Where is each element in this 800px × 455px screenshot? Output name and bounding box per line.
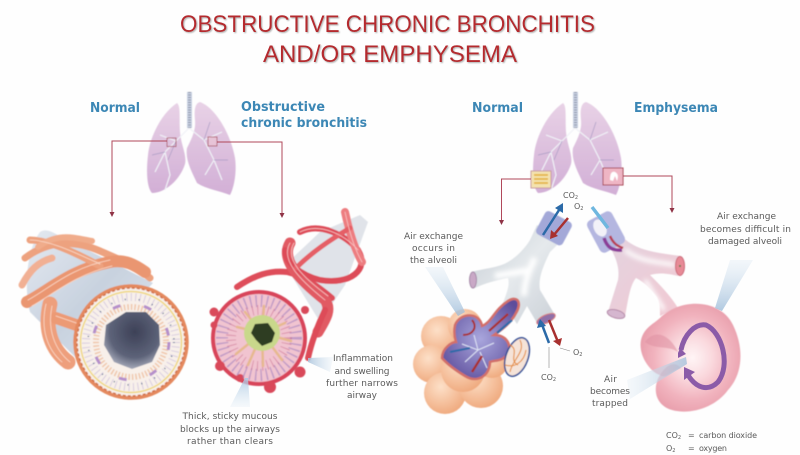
text: air exchange difficult: Air exchange [717,212,776,222]
text: air becomes trapped [590,375,630,409]
legend [666,431,757,454]
text: inflammation: and swelling [334,367,390,377]
labels: gases lower: 2 [579,352,582,358]
heading: normal (bronchitis side): Normal [90,101,140,116]
text: inflammation [326,354,398,401]
text: inflammation: airway [347,391,378,401]
labels: gases lower: CO [541,373,553,382]
pointer: air exchange in alveoli [425,267,465,316]
heading: emphysema: Emphysema [634,101,718,116]
labels: gases upper: O [574,202,580,211]
heading: obstructive chronic bronchitis: chronic bronchitis [241,116,367,131]
emphysema enlarged alveolus [641,304,740,412]
normal bronchus [470,210,573,327]
text: air exchange difficult: damaged alveoli [708,237,782,247]
legend: 2 [678,435,681,441]
airflow arrows upper [543,203,568,239]
tube body [285,215,368,322]
text: thick sticky mucous: Thick, sticky mucous [182,412,278,422]
arrow: lung to obstructed airway [217,142,284,218]
pointer: thick mucous [230,378,250,407]
capillary net [500,334,534,380]
title: OBSTRUCTIVE CHRONIC BRONCHITIS [180,11,595,38]
swollen wall [213,292,305,384]
normal airway cross-section and tube [22,230,187,398]
text: air exchange occurs: the alveoli [410,256,457,266]
lungs: emphysema diagram [531,92,623,195]
airflow arrow in emphysema bronchus [592,207,608,228]
mucosal folds [236,306,291,366]
text: thick sticky mucous: blocks up the airways [180,425,280,435]
text: inflammation: further narrows [326,379,398,389]
lumen [104,312,160,369]
text: air exchange occurs: Air exchange [404,232,463,242]
legend: 2 [672,448,675,454]
text: thick sticky mucous: rather than clears [187,437,273,447]
text: air exchange difficult: becomes difficult in [700,225,791,235]
tube body [27,230,153,362]
lungs: bronchitis diagram [147,92,236,195]
mucus ring [244,315,280,351]
legend: carbon dioxide [699,431,757,440]
text: inflammation: Inflammation [333,354,393,364]
legend: = [688,444,695,453]
labels: gases upper: 2 [580,206,583,212]
labels: gases lower [541,347,582,383]
text: air becomes trapped: Air [604,375,617,385]
normal alveoli cluster [413,299,534,414]
heading: normal (emphysema side): Normal [472,101,523,116]
text: thick sticky mucous [180,412,280,447]
airway wall [75,286,187,398]
arrow: lung to normal alveoli [499,179,531,225]
inner airflow [497,320,512,333]
labels: gases lower: 2 [553,377,556,383]
heading: obstructive chronic bronchitis: Obstructive [241,100,325,115]
obstructed airway cross-section and tube [210,212,368,393]
smooth muscle bands [22,237,150,362]
airflow arrows lower [537,319,562,346]
inflamed muscle bands [237,212,362,358]
title [180,11,595,68]
arrow: normal lung to normal airway [110,141,167,217]
pointer: air trapped [627,357,687,399]
legend: = [688,431,695,440]
title: AND/OR EMPHYSEMA [263,41,517,68]
text: air exchange occurs: occurs in [412,244,455,254]
trapped air circular arrow [678,325,724,388]
emphysema bronchus [585,210,684,320]
narrowed lumen [251,323,275,346]
text: air becomes trapped: trapped [592,399,628,409]
text: air exchange difficult [700,212,791,247]
labels: gases upper [563,191,583,212]
labels: gases upper: CO [563,191,575,200]
pointer: air exchange difficult [715,260,753,311]
legend: CO [666,431,678,440]
labels: gases upper: 2 [575,195,578,201]
legend: oxygen [699,444,727,453]
labels: gases lower: O [573,348,579,357]
text: air becomes trapped: becomes [590,387,630,397]
legend: O [666,444,672,453]
heading: obstructive chronic bronchitis [241,100,367,131]
pointer: inflammation [308,357,333,372]
arrow: lung to damaged alveoli [623,176,674,213]
cutaway sacs [442,299,519,379]
text: air exchange occurs [404,232,463,266]
